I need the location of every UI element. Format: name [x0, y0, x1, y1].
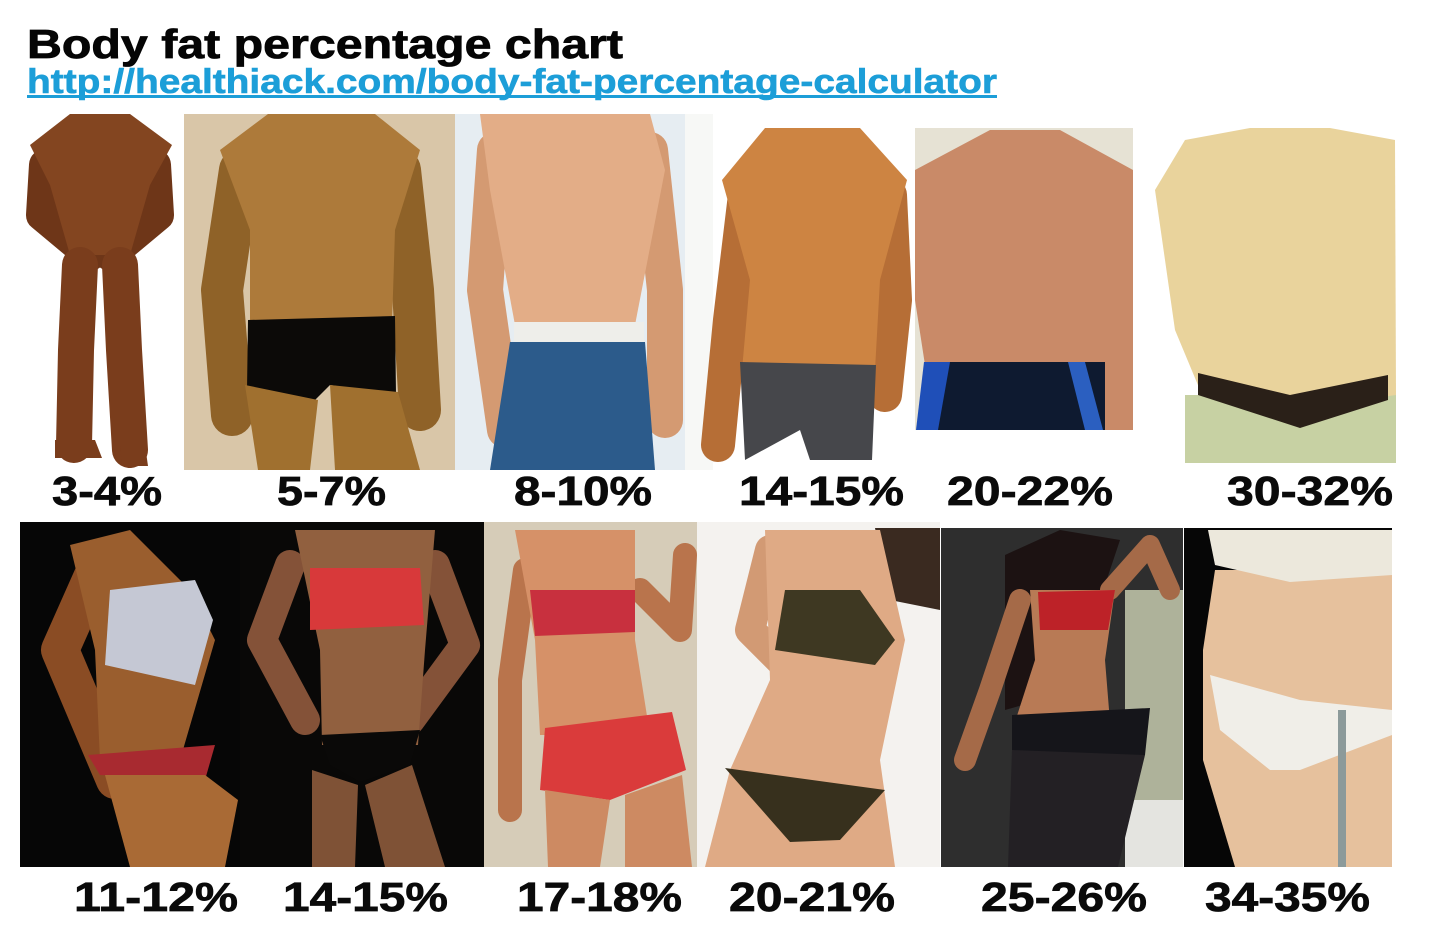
panel: female 20-21% — [697, 522, 940, 867]
panel: male 3-4% — [30, 114, 172, 466]
label: 20-21%: 20-21% — [729, 874, 895, 920]
label: 25-26%: 25-26% — [981, 874, 1147, 920]
panel: male 20-22% — [915, 128, 1133, 430]
panel: male 14-15% — [718, 128, 907, 460]
panel: female 11-12% — [20, 522, 240, 867]
panel: male 30-32% — [1155, 128, 1396, 463]
title: Body fat percentage chart — [27, 21, 623, 67]
label: 14-15% male: 14-15% — [739, 468, 904, 514]
label: 8-10%: 8-10% — [514, 468, 652, 514]
panel: female 25-26% — [941, 528, 1183, 867]
label: 14-15% female: 14-15% — [283, 874, 448, 920]
label: 11-12%: 11-12% — [74, 874, 238, 920]
label: 20-22%: 20-22% — [947, 468, 1113, 514]
label: 17-18%: 17-18% — [517, 874, 682, 920]
label: 5-7%: 5-7% — [277, 468, 386, 514]
panel: female 17-18% — [484, 522, 697, 867]
label: 3-4%: 3-4% — [52, 468, 162, 514]
panel: male 8-10% — [455, 114, 713, 470]
panel: female 14-15% — [240, 522, 484, 867]
panel: female 34-35% — [1184, 528, 1392, 867]
label: 30-32%: 30-32% — [1227, 468, 1393, 514]
link: calculator URL: http://healthiack.com/body-fat-percentage-calculator — [27, 63, 997, 101]
panel: male 5-7% — [184, 114, 455, 470]
label: 34-35%: 34-35% — [1205, 874, 1370, 920]
